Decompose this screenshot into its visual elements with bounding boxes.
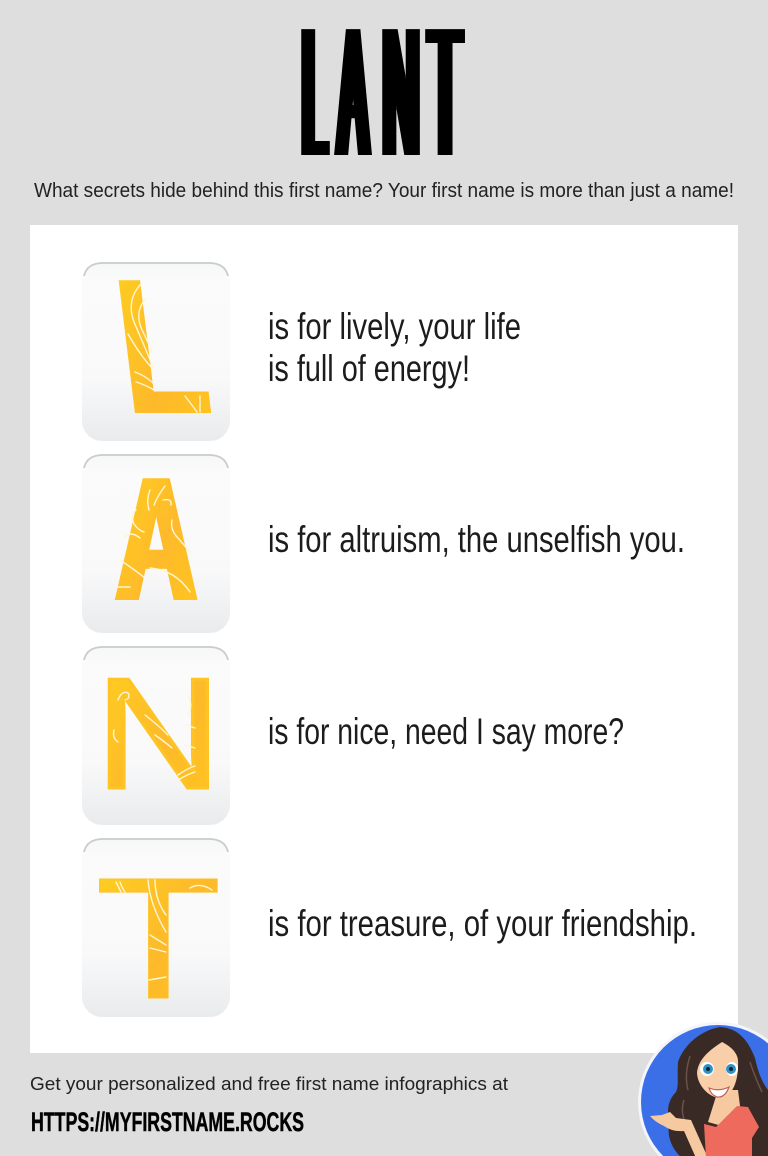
tile: letter A [82,441,230,638]
tile: letter N: N [95,646,222,822]
text: L meaning [268,305,521,389]
hair [668,1027,768,1156]
face [697,1042,738,1098]
footer url: HTTPS://MYFIRSTNAME.ROCKS [31,1107,304,1137]
panel: letter meanings [30,225,738,1053]
tile: letter L: L [104,238,221,454]
eyes [700,1062,714,1076]
shirt [704,1106,759,1156]
text: N meaning: is for nice, need I say more? [268,710,624,752]
footer text: Get your personalized and free first name infographics at [30,1073,508,1094]
text: L meaning: is for lively, your life [268,305,521,347]
subtitle: What secrets hide behind this first name? Your first name is more than just a name! [34,180,734,202]
tile: letter T: T [95,842,222,1035]
mouth [709,1087,729,1097]
tile: letter A: A [116,441,197,638]
arm and hand [650,1112,708,1156]
title [303,0,461,195]
avatar [638,1022,768,1156]
neck [708,1090,740,1126]
text: L meaning: is full of energy! [268,347,470,389]
